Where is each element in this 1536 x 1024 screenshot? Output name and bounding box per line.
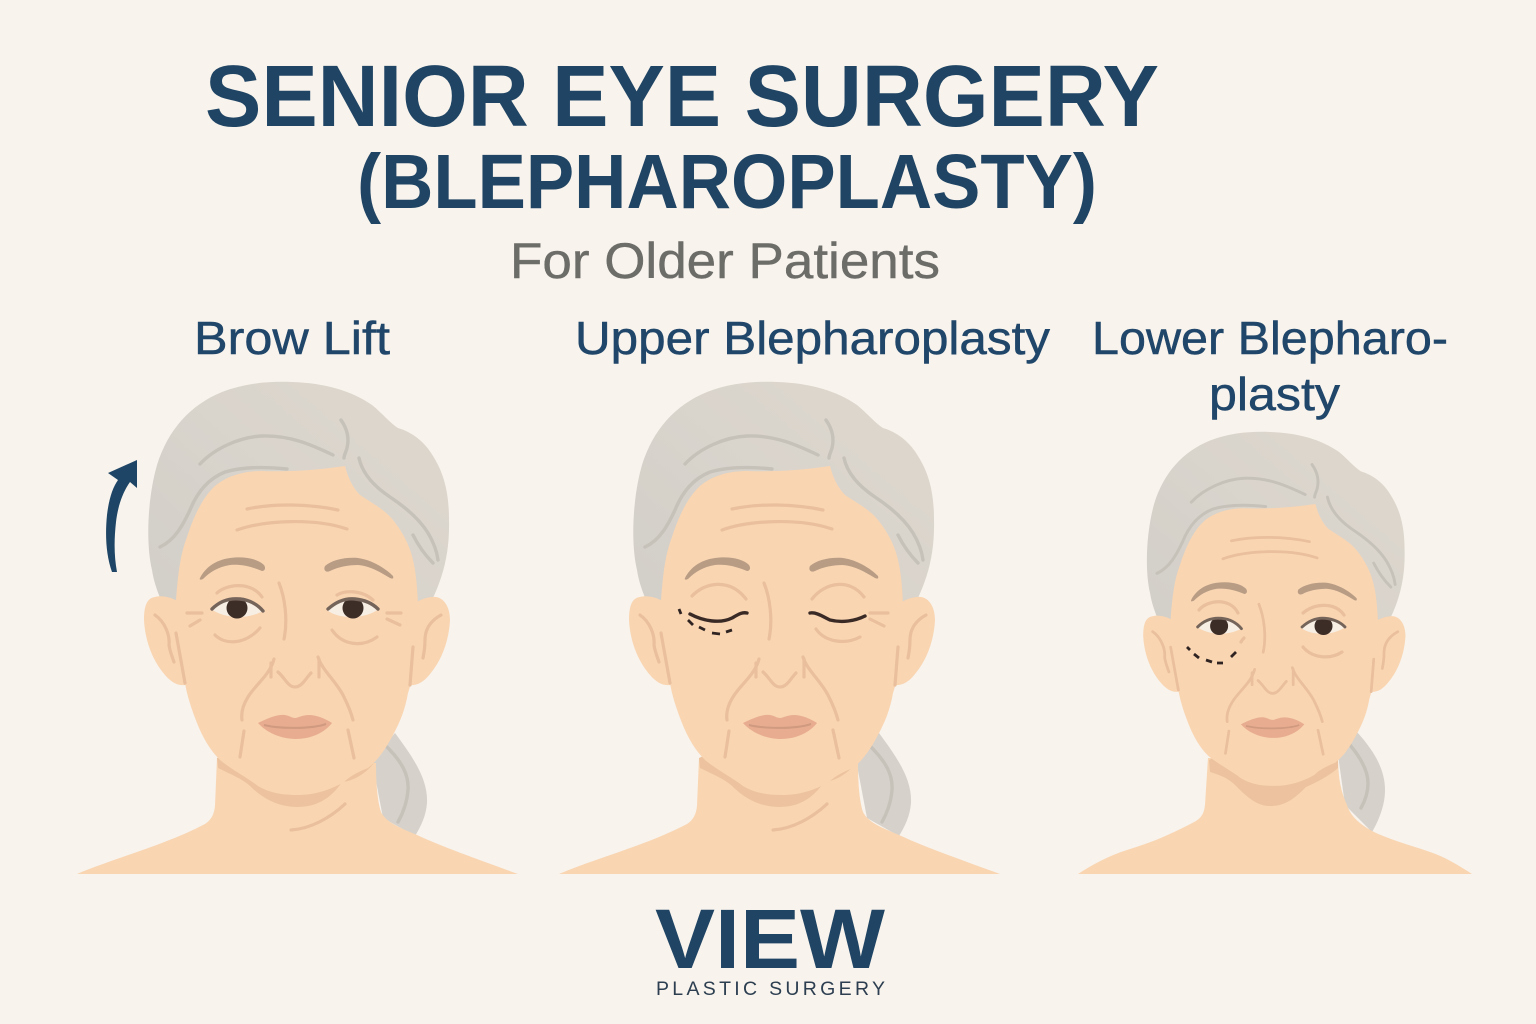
heading: lower blepharoplasty: Lower Blepharo- <box>1092 312 1448 364</box>
incision line: upper eyelid <box>679 609 732 634</box>
closed eye: right <box>810 613 865 621</box>
arrow: upward brow lift <box>106 460 137 572</box>
heading: lower blepharoplasty: plasty <box>1209 368 1340 420</box>
heading: brow lift: Brow Lift <box>194 312 390 364</box>
figure: woman with closed eyes <box>559 382 1000 874</box>
subtitle: For Older Patients <box>510 233 940 289</box>
panel: upper blepharoplasty <box>559 312 1050 874</box>
panel: brow lift <box>77 312 518 874</box>
logo: PLASTIC SURGERY <box>656 978 885 1000</box>
title: (BLEPHAROPLASTY) <box>357 139 1097 225</box>
panel: lower blepharoplasty <box>1078 312 1472 874</box>
logo: VIEW <box>655 892 886 986</box>
closed eye: left <box>690 613 747 621</box>
figure: woman with lower lid markings <box>1078 432 1472 874</box>
title: SENIOR EYE SURGERY <box>205 48 1159 145</box>
figure: woman before brow lift <box>77 382 518 874</box>
title <box>205 48 1159 225</box>
heading: lower blepharoplasty <box>1092 312 1448 420</box>
incision line: lower eyelid <box>1187 647 1236 663</box>
heading: upper blepharoplasty: Upper Blepharoplasty <box>575 312 1050 364</box>
